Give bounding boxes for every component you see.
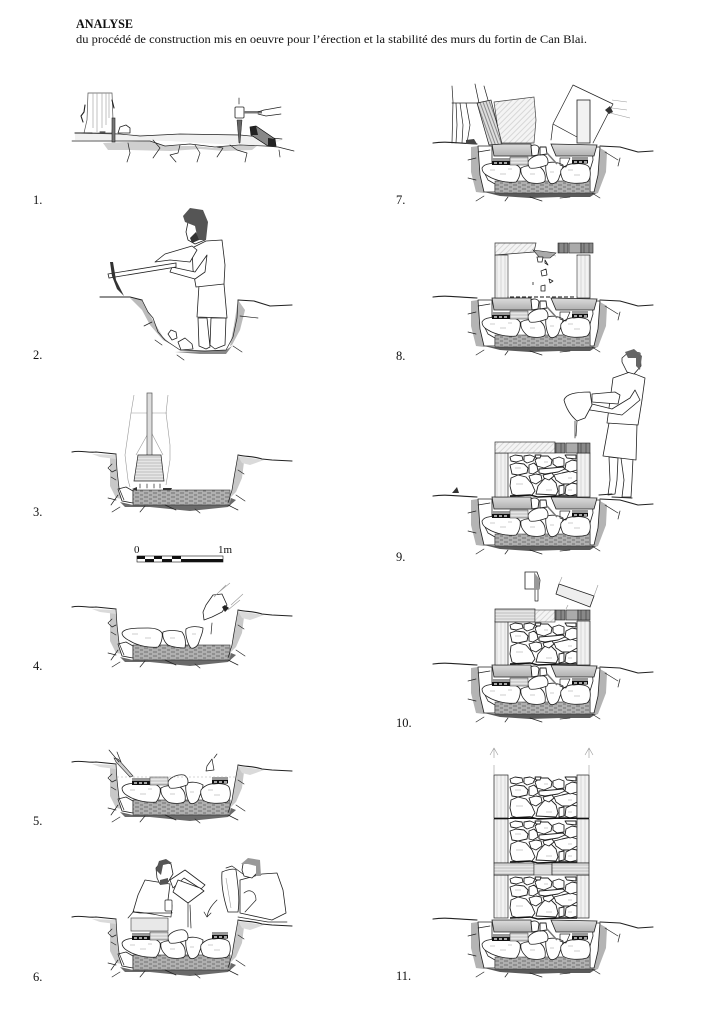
course dividers: [494, 818, 589, 820]
hand: [605, 100, 630, 118]
tuft: [452, 487, 459, 493]
number 6: 6.: [33, 970, 42, 984]
panel: step 1 staking out the ground: [33, 93, 294, 207]
legs of carrier: [452, 84, 488, 143]
trench 6: [72, 916, 292, 978]
panel: step 3 ramming the clay: [33, 393, 292, 519]
panel: step 11 completed wall: [396, 748, 653, 983]
stones and rows: [122, 930, 230, 959]
foundation 7: [433, 142, 653, 201]
subtitle: du procédé de construction mis en oeuvre pour l’érection et la stabilité des murs du fortin de Can Blai.: [76, 32, 587, 46]
trench 3: [72, 451, 292, 513]
panel: step 2 digging with a pick: [33, 208, 292, 362]
stake and stone: [112, 118, 130, 142]
stones: [122, 627, 203, 648]
number 4: 4.: [33, 659, 42, 673]
man with pick: [108, 208, 227, 349]
title block: [76, 17, 587, 46]
level line: [117, 776, 236, 778]
tilted post: [477, 100, 502, 145]
number 5: 5.: [33, 814, 42, 828]
posts: [495, 621, 590, 665]
hand carrying stone: [203, 583, 243, 634]
top course: [495, 609, 590, 622]
posts: [495, 453, 590, 497]
ground contact: [510, 296, 575, 298]
man with bucket: [564, 349, 645, 498]
number 2: 2.: [33, 348, 42, 362]
hammer and stake: [235, 98, 281, 143]
wall stones: [510, 623, 577, 665]
beam block: [131, 918, 168, 931]
panel: step 10 adding the next course: [396, 572, 653, 730]
wall stones: [510, 777, 577, 919]
number 1: 1.: [33, 193, 42, 207]
number 7: 7.: [396, 193, 405, 207]
right man with slab: [204, 858, 287, 922]
tilted panel: [551, 85, 613, 143]
trench 5: [72, 761, 292, 823]
panel: step 4 placing stones: [33, 583, 292, 673]
wall stones: [510, 455, 577, 497]
foundation 8: [433, 296, 653, 355]
top slab and blocks: [495, 243, 593, 296]
stones and rows: [122, 775, 230, 804]
top slab and blocks: [495, 442, 590, 453]
tool and hands: [109, 750, 217, 777]
tree trunk: [75, 93, 114, 133]
rammer: [132, 393, 172, 491]
arrows: [490, 748, 593, 775]
left man: [128, 859, 205, 928]
left slab: [494, 97, 536, 143]
number 10: 10.: [396, 716, 412, 730]
standing post: [577, 100, 590, 143]
log: [250, 126, 276, 146]
panel: step 7 placing posts and slabs: [396, 84, 653, 207]
number 9: 9.: [396, 550, 405, 564]
panel: step 5 laying the rows: [33, 750, 292, 828]
foundation 11: [433, 918, 653, 977]
scale bar: 0: [134, 544, 140, 556]
trench 2: [100, 297, 292, 360]
middle beam: [494, 863, 589, 875]
man's legs: [125, 395, 170, 487]
number 3: 3.: [33, 505, 42, 519]
small mould: [525, 572, 540, 601]
posts: [494, 775, 589, 918]
foundation 9: [433, 495, 653, 554]
panel: step 8 filling the formwork: [396, 243, 653, 363]
heading: ANALYSE: [76, 17, 133, 31]
trench 4: [72, 606, 292, 668]
ground strip: [72, 133, 294, 162]
number 11: 11.: [396, 969, 411, 983]
scale bar: 1m: [218, 544, 232, 556]
panel: step 6 two men placing the beam: [33, 858, 292, 984]
foundation 10: [433, 663, 653, 722]
number 8: 8.: [396, 349, 405, 363]
scale bar: [134, 544, 232, 562]
panel: step 9 pouring water: [396, 349, 653, 564]
falling stones: [533, 250, 556, 291]
posts: [495, 255, 590, 298]
tilted beam: [556, 577, 598, 609]
